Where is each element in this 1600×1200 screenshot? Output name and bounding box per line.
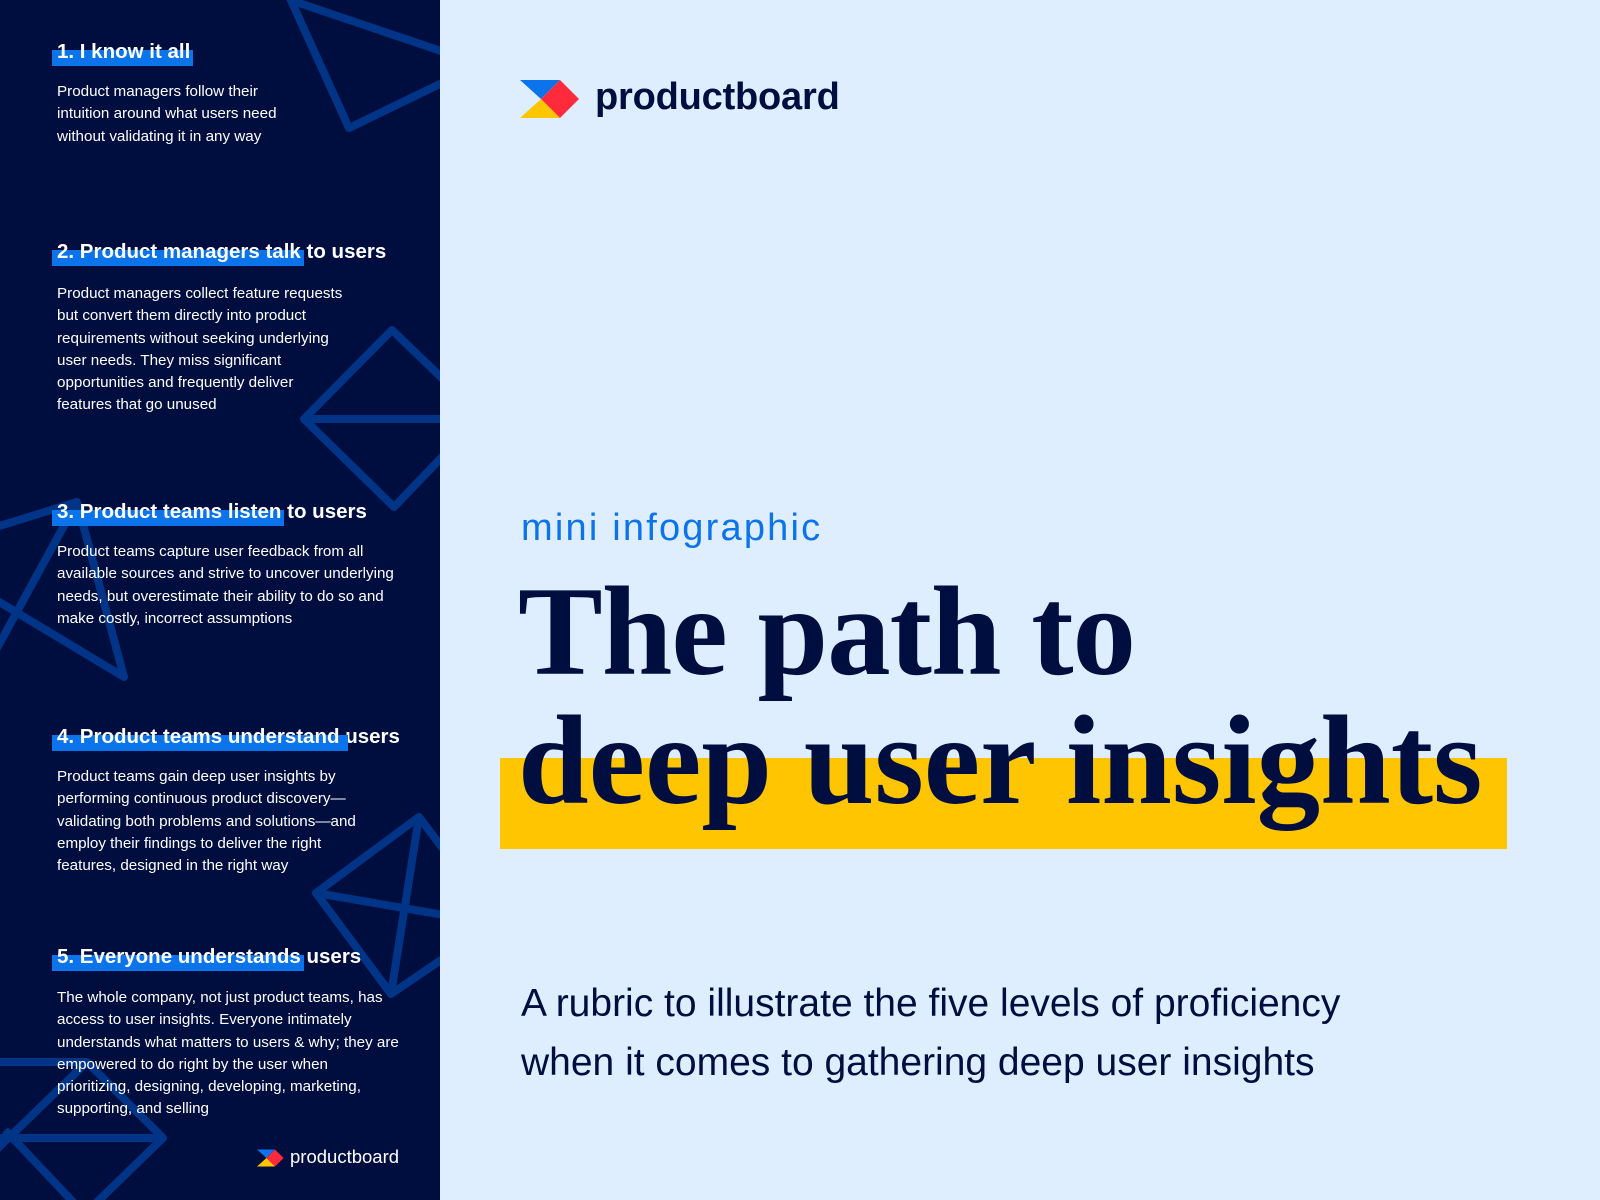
body 4: Product teams gain deep user insights by	[57, 768, 336, 785]
body 3	[57, 543, 394, 627]
body 2: requirements without seeking underlying	[57, 330, 329, 347]
body 2: opportunities and frequently deliver	[57, 374, 293, 391]
body 5: empowered to do right by the user when	[57, 1056, 328, 1073]
body 3: make costly, incorrect assumptions	[57, 610, 292, 627]
heading 3: 3. Product teams listen to users	[57, 500, 367, 523]
subtitle: A rubric to illustrate the five levels of proficiency	[521, 982, 1340, 1025]
body 2: but convert them directly into product	[57, 307, 306, 324]
logo: productboard	[595, 76, 840, 118]
body 5: understands what matters to users & why; they are	[57, 1034, 399, 1051]
body 4: validating both problems and solutions—and	[57, 813, 356, 830]
title: The path to	[518, 562, 1135, 702]
decorative triangles	[0, 0, 440, 1200]
heading 4: 4. Product teams understand users	[57, 725, 400, 748]
highlight bar	[500, 758, 1507, 849]
body 3: Product teams capture user feedback from all	[57, 543, 363, 560]
heading 1: 1. I know it all	[57, 40, 190, 63]
body 4: performing continuous product discovery—	[57, 790, 346, 807]
body 5: The whole company, not just product teams, has	[57, 989, 383, 1006]
body 2: user needs. They miss significant	[57, 352, 281, 369]
body 1	[57, 83, 277, 145]
heading 5: 5. Everyone understands users	[57, 945, 361, 968]
body 5: access to user insights. Everyone intimately	[57, 1011, 352, 1028]
small logo: productboard	[290, 1146, 399, 1167]
title	[518, 562, 1482, 831]
body 2: Product managers collect feature requests	[57, 285, 342, 302]
heading 2: 2. Product managers talk to users	[57, 240, 386, 263]
body 3: needs, but overestimate their ability to do so and	[57, 588, 384, 605]
body 3: available sources and strive to uncover underlying	[57, 565, 394, 582]
body 1: without validating it in any way	[57, 128, 261, 145]
body 4: employ their findings to deliver the right	[57, 835, 321, 852]
body 1: Product managers follow their	[57, 83, 258, 100]
body 2: features that go unused	[57, 396, 217, 413]
body 4: features, designed in the right way	[57, 857, 288, 874]
panel: levels sidebar	[0, 0, 440, 1200]
body 5: supporting, and selling	[57, 1100, 209, 1117]
body 1: intuition around what users need	[57, 105, 277, 122]
body 2	[57, 285, 342, 413]
body 5	[57, 989, 399, 1117]
body 4	[57, 768, 356, 874]
subtitle	[521, 982, 1340, 1084]
subtitle: when it comes to gathering deep user insights	[521, 1041, 1314, 1084]
kicker: mini infographic: mini infographic	[521, 507, 822, 549]
body 5: prioritizing, designing, developing, marketing,	[57, 1078, 361, 1095]
title: deep user insights	[518, 691, 1482, 831]
